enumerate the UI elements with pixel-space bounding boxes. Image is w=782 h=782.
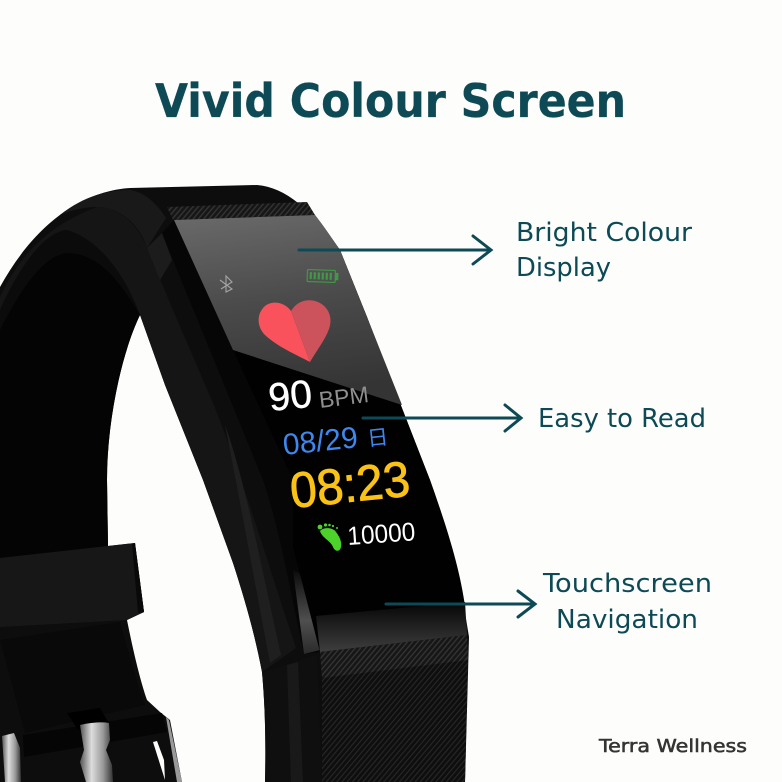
right silver buckle frame — [166, 717, 182, 782]
dark side stripe — [162, 220, 320, 654]
buckle bar — [23, 713, 167, 757]
label: easy to read: Easy to Read — [538, 404, 706, 434]
icon: battery — [307, 270, 338, 283]
lower band facet — [262, 655, 322, 782]
keeper loop side — [132, 543, 144, 613]
label: touchscreen navigation: Touchscreen — [542, 569, 712, 599]
icon: bluetooth — [220, 276, 232, 292]
label: touchscreen navigation: Navigation — [556, 605, 698, 635]
silver pin — [80, 722, 113, 782]
screen content — [220, 270, 416, 551]
heart rate value: 90 — [266, 373, 314, 420]
glossy screen reflection — [174, 215, 402, 405]
time: 08:23 — [287, 451, 412, 519]
step count: 10000 — [346, 516, 416, 551]
chevron hatched strip — [320, 635, 468, 678]
icon: footprint — [318, 523, 341, 551]
inner arc facet — [0, 230, 140, 330]
arrow: touchscreen navigation — [386, 591, 535, 617]
outer rim facet — [0, 207, 296, 672]
inner band surface — [0, 253, 140, 558]
date: 08/29 — [281, 421, 359, 462]
seam highlight — [147, 233, 172, 280]
top hatched texture — [167, 202, 315, 220]
band silhouette — [0, 185, 469, 782]
label: bright colour display — [516, 218, 692, 283]
title: Vivid Colour Screen — [155, 74, 626, 128]
label: bright colour display: Bright Colour — [516, 218, 692, 248]
keeper loop — [0, 543, 144, 627]
arrow: bright colour display — [299, 236, 491, 264]
label: touchscreen navigation — [542, 569, 712, 635]
screen — [174, 215, 466, 652]
top band highlight — [60, 190, 166, 248]
light side stripe — [225, 425, 281, 663]
day marker: 日 — [366, 426, 389, 451]
heart rate unit: BPM — [317, 381, 370, 413]
lower bezel reflection — [316, 602, 467, 652]
buckle gap — [67, 708, 110, 730]
lower hatched texture — [322, 655, 468, 782]
gloss streak on bezel — [293, 570, 320, 654]
lower band stripe — [287, 662, 303, 782]
arrow: easy to read — [363, 405, 521, 431]
icon: heart — [259, 300, 331, 362]
label: bright colour display: Display — [516, 253, 611, 283]
lower strap shadow — [0, 622, 145, 733]
left silver buckle frame — [2, 733, 21, 782]
fitness band illustration — [0, 185, 469, 782]
brand name: Terra Wellness — [598, 736, 747, 757]
buckle opening — [153, 741, 165, 780]
